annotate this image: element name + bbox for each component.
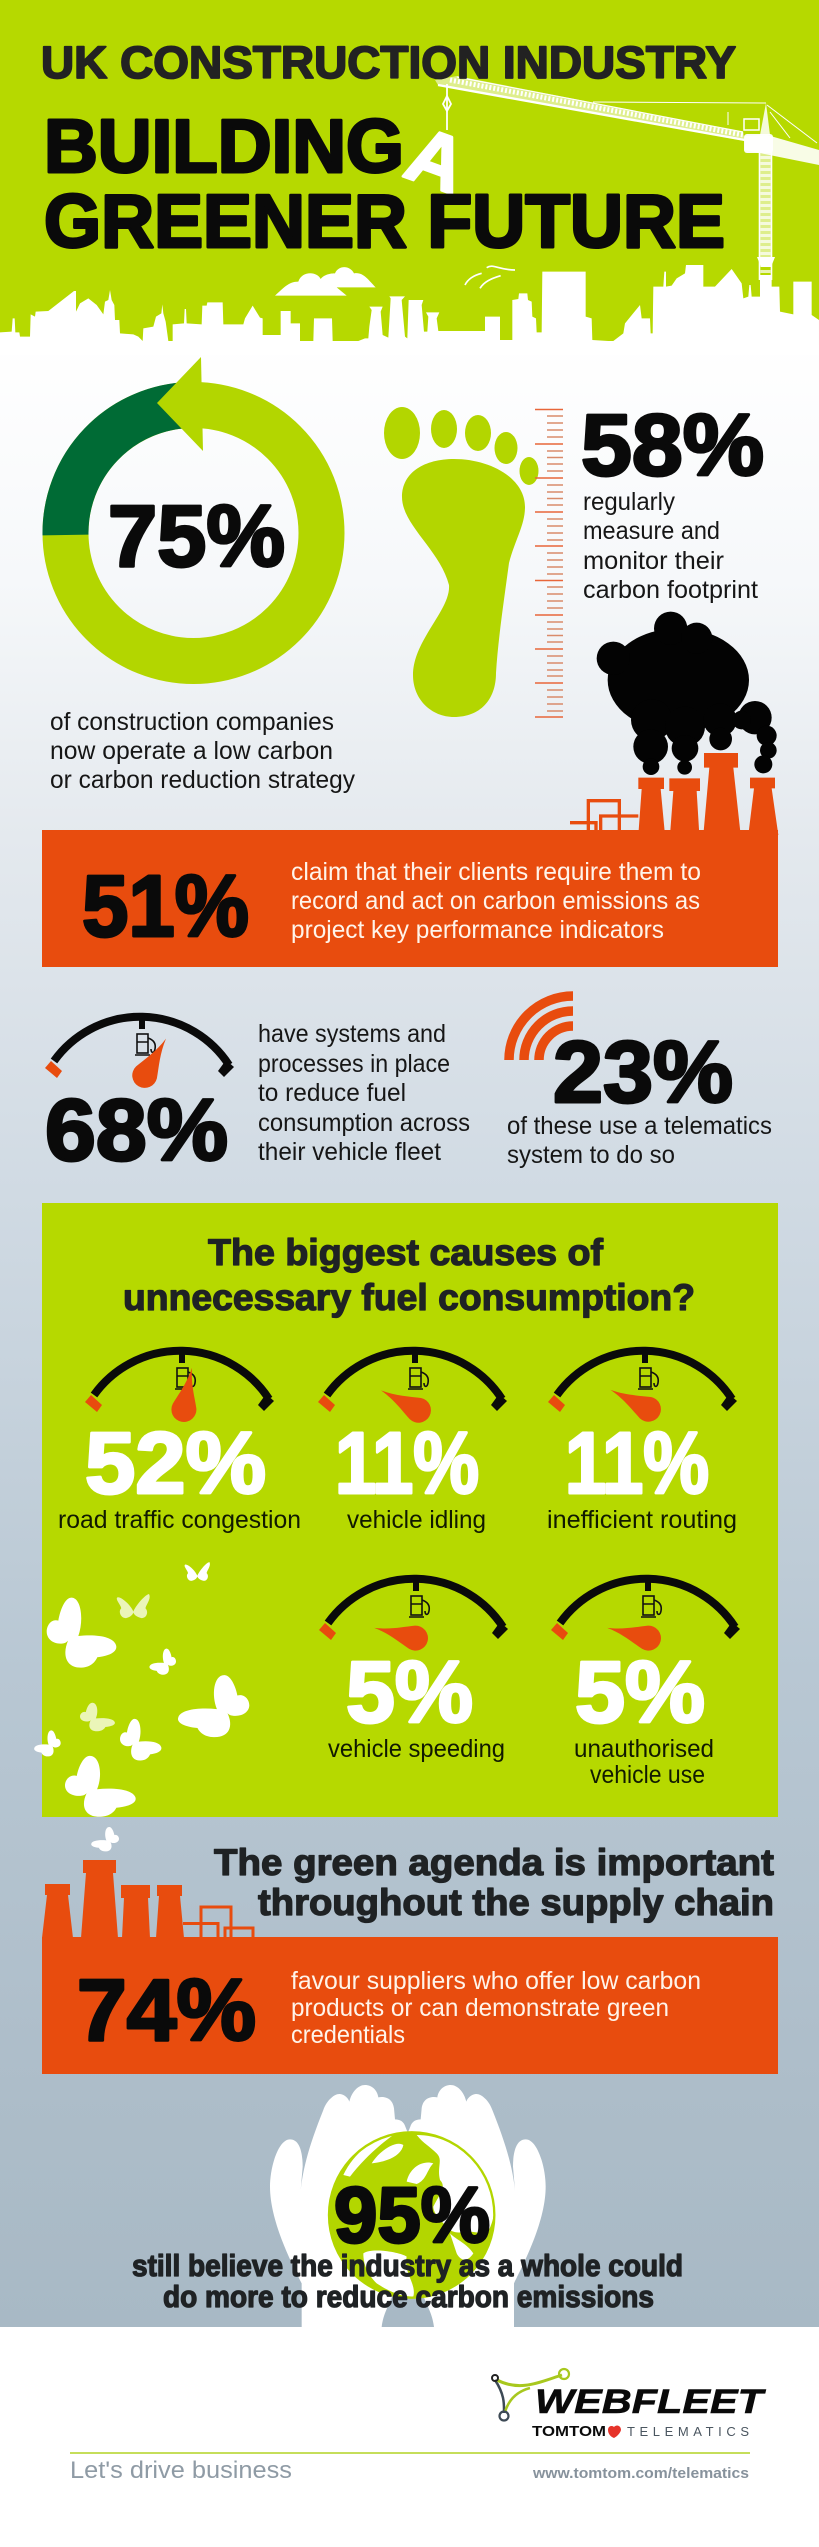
text: 75% caption: or carbon reduction strategy — [50, 766, 355, 794]
label: unauthorised vehicle use — [574, 1735, 714, 1789]
text: 51% caption: claim that their clients require them to — [291, 858, 701, 886]
icon: footprint — [384, 407, 538, 717]
text: 68% caption: their vehicle fleet — [258, 1138, 441, 1166]
text: 68% caption: to reduce fuel — [258, 1079, 406, 1107]
divider line — [70, 2452, 750, 2454]
page background gradient — [0, 340, 819, 2327]
stat: 11% idling: 11% — [335, 1415, 479, 1512]
text: 68% caption: processes in place — [258, 1050, 450, 1078]
icon: factory 2 — [42, 1860, 253, 1938]
text: 58% caption: regularly — [583, 488, 675, 516]
icon: hands — [270, 2085, 546, 2327]
text: 58% caption — [583, 488, 758, 604]
label: unauthorised vehicle use: unauthorised — [574, 1735, 714, 1763]
stat: 5% speeding: 5% — [346, 1644, 473, 1741]
heading: biggest causes — [123, 1232, 695, 1318]
text: 51% caption — [291, 858, 701, 944]
text: 68% caption: have systems and — [258, 1020, 446, 1048]
gauge: unauthorised vehicle use — [551, 1576, 740, 1653]
title: main line 1: BUILDING — [44, 104, 404, 188]
stat: 11% routing: 11% — [565, 1415, 709, 1512]
stat: 58%: 58% — [581, 397, 764, 494]
icon: smoke cloud — [597, 612, 777, 775]
title: kicker: UK CONSTRUCTION INDUSTRY — [41, 37, 736, 88]
stat: 68%: 68% — [45, 1082, 228, 1179]
text: 58% caption: carbon footprint — [583, 576, 758, 604]
label: inefficient routing: inefficient routing — [547, 1506, 737, 1534]
logo: TomTom mark — [608, 2426, 621, 2438]
clouds — [275, 267, 376, 296]
text: 51% caption: project key performance indicators — [291, 916, 664, 944]
text: 75% caption: of construction companies — [50, 708, 334, 736]
icon: ruler — [535, 410, 563, 717]
text: 74% caption: credentials — [291, 2021, 405, 2049]
donut chart: 75% — [65, 357, 321, 661]
text: 58% caption: measure and — [583, 517, 720, 545]
tagline: Let's drive business — [70, 2457, 292, 2484]
gauge: vehicle speeding — [319, 1576, 508, 1653]
stat: 51%: 51% — [82, 858, 249, 955]
footer panel — [0, 2327, 819, 2547]
heading: 95% caption — [132, 2248, 683, 2314]
logo: WEBFLEET: WEBFLEET — [535, 2383, 767, 2421]
label: unauthorised vehicle use: vehicle use — [590, 1761, 705, 1789]
text: 74% caption — [291, 1967, 701, 2049]
logo: TELEMATICS: TELEMATICS — [627, 2424, 749, 2439]
title: hanging letter A: A — [395, 109, 478, 211]
icon: butterflies — [34, 1562, 249, 1851]
stat: 75%: 75% — [108, 488, 285, 585]
stat: 95%: 95% — [334, 2170, 490, 2259]
stat: 23%: 23% — [553, 1024, 733, 1121]
label: road traffic congestion: road traffic congestion — [58, 1506, 301, 1534]
panel: biggest causes — [42, 1203, 778, 1817]
birds — [465, 266, 515, 288]
stat: 74%: 74% — [77, 1962, 256, 2059]
label: vehicle speeding: vehicle speeding — [328, 1735, 505, 1763]
website: www.tomtom.com/telematics — [532, 2465, 749, 2482]
text: 68% caption: consumption across — [258, 1109, 470, 1137]
text: 68% caption — [258, 1020, 470, 1166]
text: 74% caption: products or can demonstrate green — [291, 1994, 669, 2022]
heading: green agenda: The green agenda is important — [214, 1842, 774, 1883]
panel: 74% band — [42, 1937, 778, 2074]
icon: globe — [328, 2132, 495, 2298]
heading: green agenda — [214, 1842, 774, 1923]
text: 58% caption: monitor their — [583, 547, 724, 575]
stat: 52%: 52% — [85, 1415, 266, 1512]
logo: TomTom: TOMTOM — [532, 2423, 606, 2440]
gauge: inefficient routing — [548, 1348, 737, 1426]
text: 75% caption — [50, 708, 355, 794]
icon: telematics signal — [509, 996, 573, 1060]
label: vehicle idling: vehicle idling — [347, 1506, 486, 1534]
logo: webfleet icon — [492, 2369, 569, 2420]
text: 74% caption: favour suppliers who offer low carbon — [291, 1967, 701, 1995]
gauge: road traffic congestion — [85, 1348, 274, 1424]
text: 51% caption: record and act on carbon emissions as — [291, 887, 700, 915]
heading: biggest causes: unnecessary fuel consumption? — [123, 1277, 695, 1318]
heading: 95% caption: do more to reduce carbon emissions — [163, 2279, 654, 2314]
heading: 95% caption: still believe the industry as a whole could — [132, 2248, 683, 2283]
text: 75% caption: now operate a low carbon — [50, 737, 333, 765]
title: main line 2: GREENER FUTURE — [44, 179, 725, 263]
header panel — [0, 0, 819, 355]
text: 23% caption — [507, 1112, 772, 1169]
icon: factory 1 — [570, 753, 778, 835]
gauge: 68% — [45, 1014, 234, 1093]
panel: 51% band — [42, 830, 778, 967]
gauge: vehicle idling — [318, 1348, 507, 1427]
stat: 5% unauthorised: 5% — [575, 1644, 705, 1741]
skyline silhouette — [0, 265, 819, 355]
heading: biggest causes: The biggest causes of — [208, 1232, 604, 1273]
text: 23% caption: of these use a telematics — [507, 1112, 772, 1140]
heading: green agenda: throughout the supply chain — [258, 1882, 774, 1923]
text: 23% caption: system to do so — [507, 1141, 675, 1169]
crane — [435, 76, 819, 280]
